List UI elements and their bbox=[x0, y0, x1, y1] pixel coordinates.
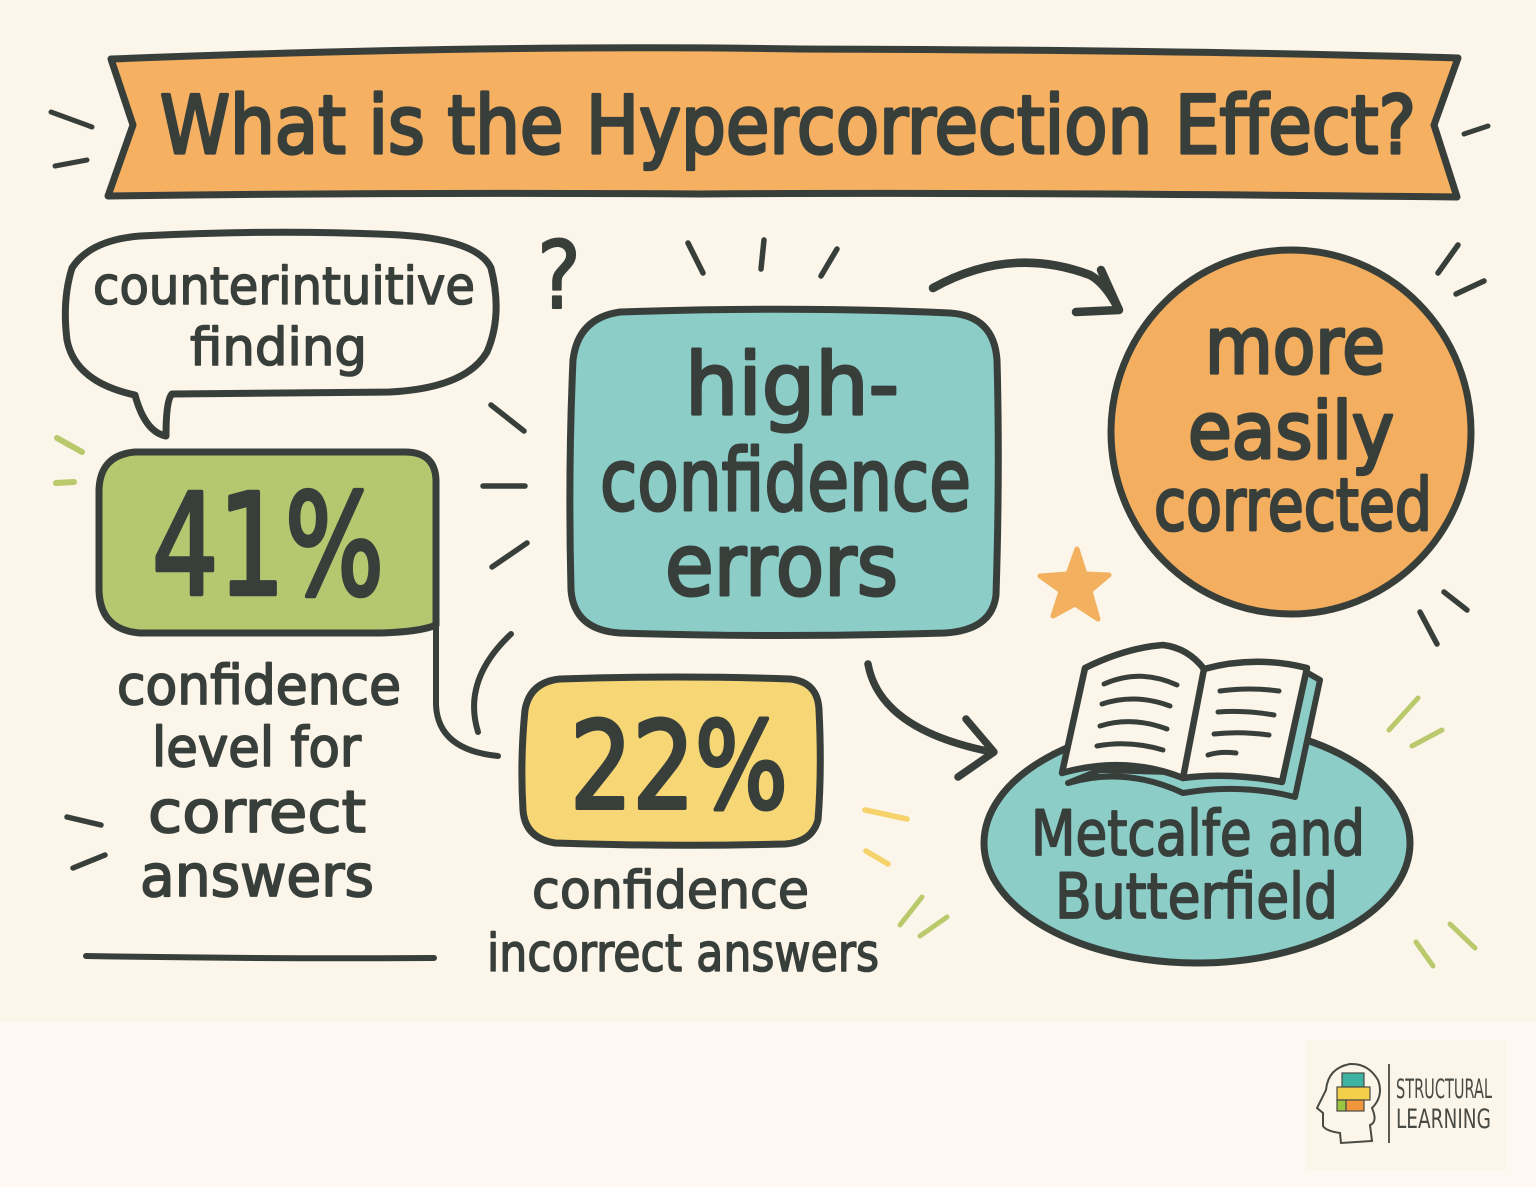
circle: more easily corrected: easily bbox=[1188, 387, 1394, 477]
main box: high-confidence errors: confidence bbox=[600, 431, 971, 531]
icon: head with blocks bbox=[1317, 1064, 1380, 1143]
yellow accent strokes bbox=[865, 810, 907, 864]
title accent strokes left bbox=[51, 112, 92, 166]
caption: confidence level for correct answers: correct bbox=[148, 778, 366, 846]
arrow to more easily corrected bbox=[933, 263, 1119, 312]
caption: confidence incorrect answers: incorrect answers bbox=[487, 924, 879, 984]
green accent strokes bbox=[56, 438, 82, 483]
main box text: high- bbox=[685, 335, 899, 435]
caption: confidence level for correct answers: level for bbox=[152, 716, 362, 779]
green accent strokes near book bbox=[1389, 698, 1475, 966]
accent strokes above teal box bbox=[688, 240, 837, 276]
main box: high-confidence errors: errors bbox=[665, 516, 898, 616]
accent strokes left of caption bbox=[67, 817, 105, 868]
circle: more easily corrected: corrected bbox=[1154, 463, 1432, 547]
circle: more easily corrected bbox=[1111, 250, 1471, 614]
oval text: Metcalfe and bbox=[1031, 797, 1365, 870]
title accent stroke right bbox=[1464, 126, 1488, 134]
speech bubble: counterintuitive finding: finding bbox=[190, 318, 367, 378]
caption: confidence incorrect answers bbox=[487, 861, 879, 984]
green accent strokes lower bbox=[900, 897, 947, 936]
curved accent stroke bbox=[474, 634, 511, 732]
bubble text: counterintuitive bbox=[93, 257, 475, 317]
caption: confidence level for correct answers: confidence bbox=[117, 654, 401, 717]
stat box: 41% bbox=[99, 452, 436, 633]
logo divider bbox=[1388, 1064, 1390, 1143]
logo: Structural Learning: LEARNING bbox=[1396, 1104, 1491, 1135]
caption: confidence incorrect answers: confidence bbox=[532, 861, 809, 921]
question mark: ? bbox=[537, 222, 581, 331]
stat box: 22% bbox=[522, 677, 820, 845]
arrow to Metcalfe and Butterfield bbox=[868, 664, 994, 777]
star bbox=[1040, 549, 1109, 619]
speech bubble: counterintuitive finding bbox=[65, 232, 496, 436]
stat value 41%: 41% bbox=[152, 465, 384, 628]
caption: confidence level for correct answers bbox=[117, 654, 401, 910]
accent strokes near circle bbox=[1420, 245, 1484, 644]
accent strokes left of teal box bbox=[483, 405, 527, 567]
connector from 41% box to 22% box bbox=[436, 625, 498, 756]
circle text: more bbox=[1205, 302, 1385, 392]
oval: Metcalfe and Butterfield: Butterfield bbox=[1055, 860, 1338, 933]
logo: Structural Learning bbox=[1307, 1040, 1506, 1170]
title banner bbox=[108, 48, 1458, 197]
oval: Metcalfe and Butterfield bbox=[984, 723, 1410, 963]
icon: open book bbox=[1062, 645, 1320, 797]
underline bbox=[86, 956, 434, 958]
stat value 22%: 22% bbox=[570, 698, 788, 837]
main box: high-confidence errors bbox=[570, 309, 998, 636]
caption: confidence level for correct answers: answers bbox=[140, 842, 374, 910]
